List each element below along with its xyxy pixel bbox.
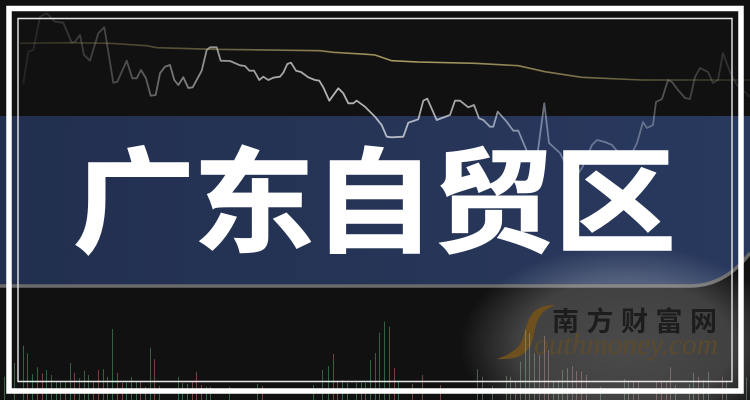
glow behind logo <box>460 245 750 400</box>
title char 2: 东 <box>193 140 315 267</box>
logo domain: outhmoney.com <box>534 328 718 361</box>
volume bars over glow: red <box>516 336 722 400</box>
volume bars over glow: green <box>478 330 746 400</box>
title char 3: 自 <box>313 140 435 267</box>
volume bars: green <box>4 322 398 400</box>
logo: southmoney <box>497 305 724 361</box>
logo Chinese name: 南方财富网 <box>552 306 724 337</box>
title char 5: 区 <box>554 140 676 267</box>
title char 1: 广 <box>73 140 195 267</box>
band bottom edge <box>0 253 750 286</box>
logo swoosh <box>497 305 555 359</box>
moving average line <box>20 43 750 80</box>
volume bars: red <box>28 353 440 400</box>
band: blue title banner <box>0 116 750 285</box>
title char 4: 贸 <box>433 140 555 267</box>
title <box>73 140 676 267</box>
price line chart <box>23 13 750 178</box>
